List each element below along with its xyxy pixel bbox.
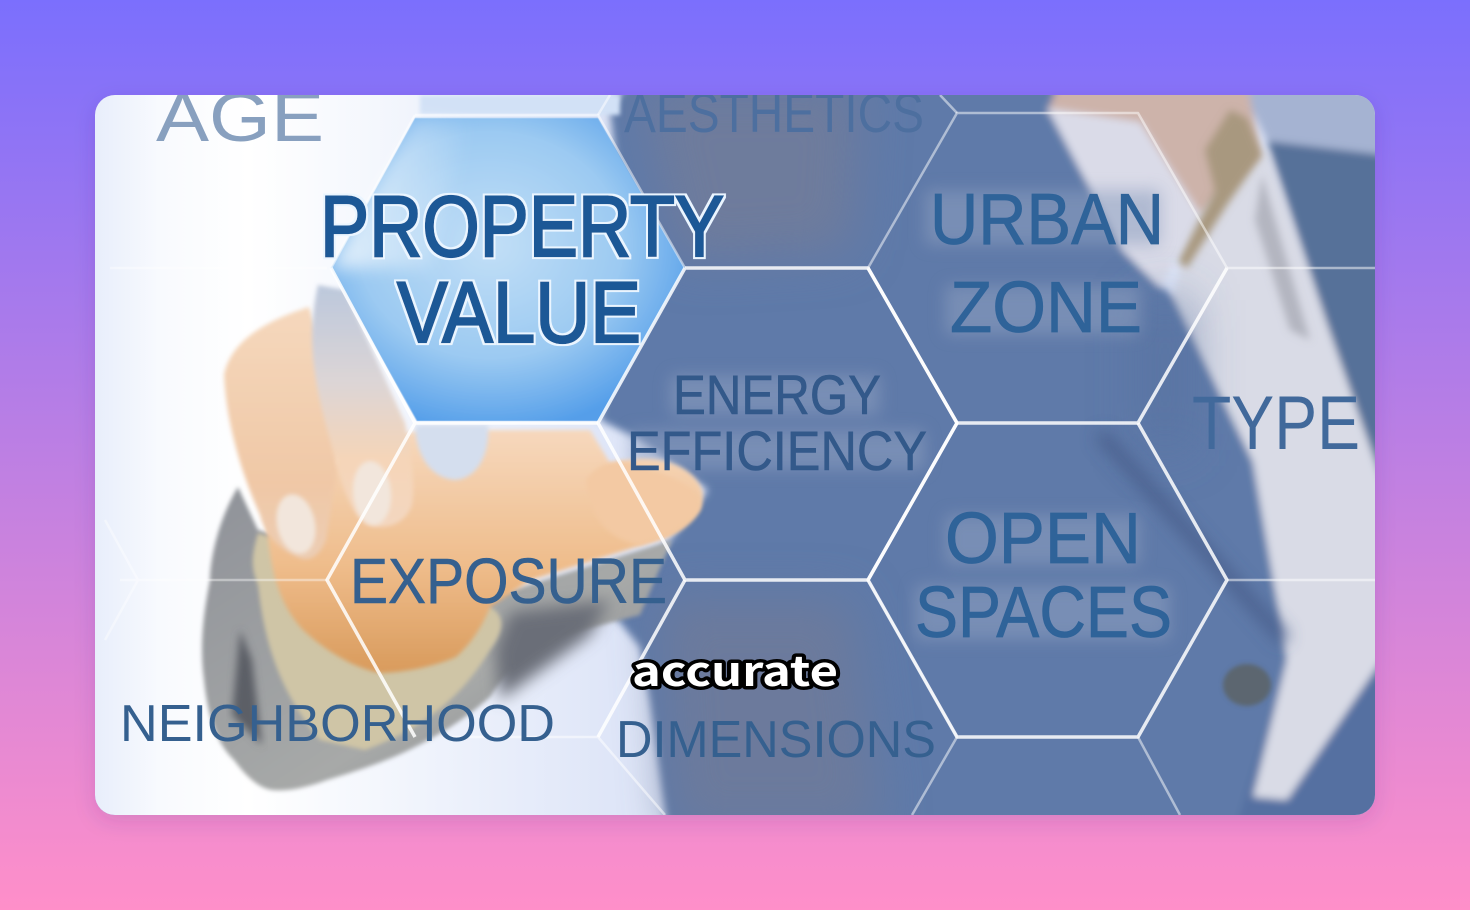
label: neighborhood: NEIGHBORHOOD	[120, 695, 555, 753]
suit lapel shadow	[1100, 434, 1285, 640]
suit tone patches	[640, 85, 1190, 830]
fingernail one	[274, 492, 318, 556]
caption: accurate	[632, 638, 838, 698]
label: exposure: EXPOSURE	[350, 545, 667, 617]
label: dimensions: DIMENSIONS	[616, 711, 936, 769]
pointing fingertip	[415, 425, 488, 480]
businessman suit	[600, 80, 1385, 830]
label: urban: URBAN	[930, 180, 1164, 260]
label: open: OPEN	[945, 499, 1141, 579]
fingernail two	[350, 459, 394, 527]
label: energy: ENERGY	[673, 363, 881, 426]
text glow patches	[630, 190, 1170, 640]
label: zone: ZONE	[950, 268, 1142, 348]
shirt cuff	[253, 533, 501, 750]
photo panel	[95, 78, 1385, 830]
highlighted hexagon	[331, 118, 685, 421]
wrist and palm	[265, 430, 703, 673]
hexagon grid	[105, 95, 1375, 815]
label: spaces: SPACES	[915, 573, 1172, 653]
photo background	[95, 95, 1375, 815]
curled finger	[224, 307, 345, 559]
heading: property value: VALUE	[397, 265, 641, 361]
sleeve shadow	[232, 630, 262, 745]
card shadow	[95, 95, 1375, 815]
jacket sleeve	[202, 487, 672, 790]
necktie and collar fold	[1178, 110, 1310, 340]
heading: property value: PROPERTY	[320, 179, 724, 275]
label: type: TYPE	[1192, 381, 1360, 466]
middle finger	[312, 285, 413, 527]
label: efficiency: EFFICIENCY	[627, 419, 927, 482]
hexagon labels	[120, 78, 1360, 769]
light top strip	[420, 95, 620, 115]
label: aesthetics: AESTHETICS	[624, 81, 924, 144]
heading: property value	[323, 192, 726, 346]
suit button	[1223, 664, 1271, 706]
hand and sleeve	[202, 285, 703, 790]
thumb	[586, 462, 701, 545]
hexagon left fade	[331, 118, 470, 268]
label: age: AGE	[156, 78, 324, 156]
